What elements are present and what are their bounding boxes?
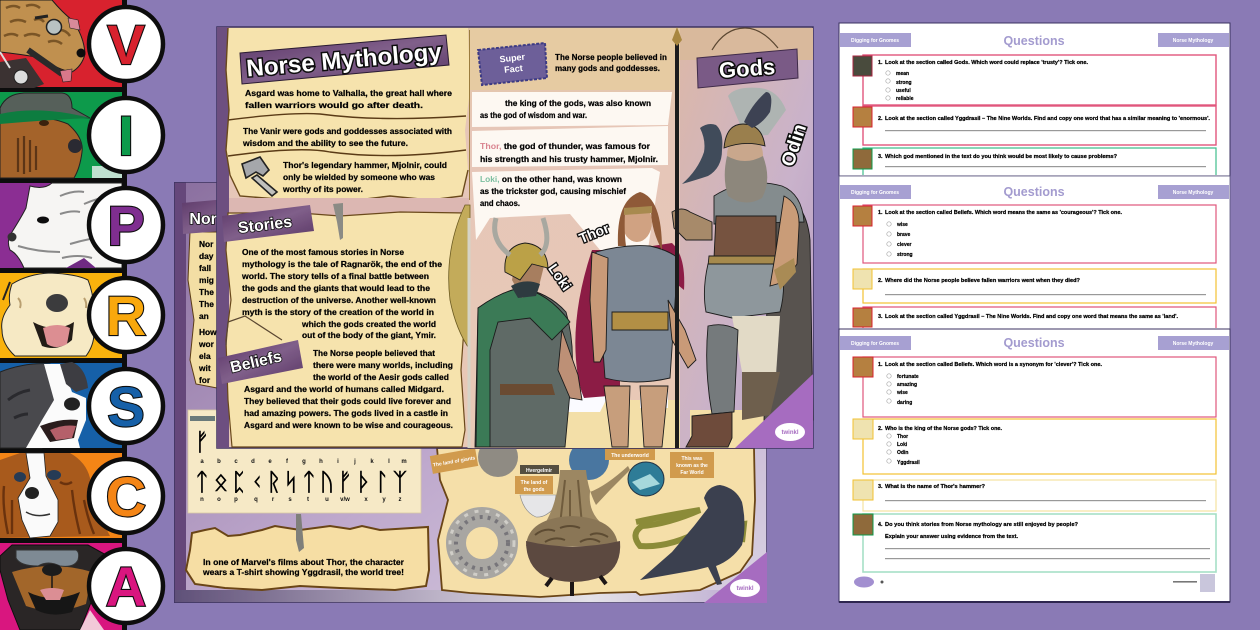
panel: gods right background xyxy=(470,28,813,448)
panel: Marvel fact parchment: wears a T-shirt showing Yggdrasil, the world tree! xyxy=(202,567,404,577)
question 3: 3. xyxy=(878,314,883,320)
icon: blue world orb xyxy=(569,448,609,480)
panel: rune alphabet: ᛉ xyxy=(393,468,407,496)
parchment: facts xyxy=(226,28,470,202)
rope: beliefs sign xyxy=(226,316,282,345)
panel: rune alphabet: r xyxy=(272,497,275,503)
panel: rune alphabet: n xyxy=(200,497,204,503)
Loki face xyxy=(512,258,545,298)
Thor band xyxy=(624,206,652,215)
question 1: 1. xyxy=(878,362,883,368)
banner: Norse (partly hidden) xyxy=(182,200,216,234)
letter I xyxy=(89,98,163,172)
panel: rune alphabet: g xyxy=(302,459,306,465)
panel: rune alphabet: ᛚ xyxy=(375,468,389,496)
box: Loki fact: and chaos. xyxy=(480,198,520,208)
panel: rune alphabet: v/w xyxy=(340,497,350,503)
panel: rune alphabet: ᚲ xyxy=(250,468,264,496)
header tag right xyxy=(1158,185,1229,199)
panel: rune alphabet: x xyxy=(364,497,368,503)
banner: Norse (partly hidden): Norse xyxy=(189,211,235,228)
panel: rune alphabet: e xyxy=(268,459,272,465)
back page partial text: for xyxy=(199,375,211,385)
question 1: strong xyxy=(896,80,912,86)
icon: serpent xyxy=(635,510,744,546)
question 1: useful xyxy=(896,88,911,94)
text: intro: many gods and goddesses. xyxy=(555,63,660,73)
heading: Beliefs xyxy=(218,340,303,384)
Thor belt xyxy=(612,312,668,330)
text: beliefs: Asgard and the world of humans called Midgard. xyxy=(244,384,444,394)
text: Mjolnir fact: worthy of its power. xyxy=(282,184,363,194)
heading: Gods: Gods xyxy=(718,54,776,83)
question 1: fortunate xyxy=(897,374,919,380)
letter R xyxy=(89,278,163,352)
back page partial text xyxy=(198,239,217,385)
label: Thor: Thor xyxy=(577,220,612,246)
panel: rune alphabet: m xyxy=(401,459,407,465)
box: Odin fact: the king of the gods, was also known xyxy=(505,98,651,108)
header tag left: Digging for Gnomes xyxy=(851,341,899,347)
box: Odin fact: as the god of wisdom and war. xyxy=(480,110,587,120)
panel: rune alphabet: y xyxy=(382,497,386,503)
panel: rune alphabet: o xyxy=(217,497,221,503)
logo: back page twinkl: twinkl xyxy=(736,586,754,592)
header tag right: Norse Mythology xyxy=(1173,38,1213,44)
panel: rune alphabet: ᛟ xyxy=(214,468,228,496)
label: Odin: Odin xyxy=(778,122,811,169)
labels: world tags xyxy=(430,448,714,494)
Thor cape right xyxy=(626,243,684,290)
icon: nail xyxy=(333,203,343,240)
axe xyxy=(449,205,470,448)
text: Mjolnir fact: only be wielded by someone who was xyxy=(283,172,435,182)
question 1: wise xyxy=(896,222,908,228)
question 1 xyxy=(853,357,1216,417)
text: beliefs: there were many worlds, including xyxy=(313,360,453,370)
panel: rune alphabet: p xyxy=(234,497,238,503)
labels: world tags: The land of giants xyxy=(433,455,476,469)
question 2: Look at the section called Yggdrasil – The Nine Worlds. Find and copy one word that has a similar meaning to 'enormous'. xyxy=(885,116,1211,122)
badge: logo: Super xyxy=(499,52,526,64)
Thor legs xyxy=(604,386,668,447)
panel: rune alphabet: d xyxy=(251,459,255,465)
Loki mask xyxy=(511,281,540,298)
question 2: Odin xyxy=(897,450,908,456)
text: intro xyxy=(555,52,667,73)
letter S xyxy=(89,369,163,443)
text: stories: destruction of the universe. Another well-known xyxy=(242,295,436,305)
figure: Loki xyxy=(475,218,582,447)
letter P: P xyxy=(107,194,145,257)
panel: rune alphabet: ᛋ xyxy=(284,468,298,496)
text: Valhalla fact: fallen warriors would go after death. xyxy=(245,100,423,110)
back page partial text: fall xyxy=(199,263,211,273)
letter A: A xyxy=(106,555,146,618)
question 2 xyxy=(853,269,1216,303)
text: stories: out of the body of the giant, Ymir. xyxy=(302,330,436,340)
Loki helmet xyxy=(505,243,548,280)
question 3: Which god mentioned in the text do you think would be most likely to cause problems? xyxy=(885,154,1117,160)
panel: rune alphabet: ᚠ xyxy=(338,468,352,496)
panel: rune alphabet: ᚦ xyxy=(357,468,371,496)
Odin cloak xyxy=(764,190,813,420)
corner: back page xyxy=(704,552,767,603)
question 2: Thor xyxy=(897,434,908,440)
question 2: 2. xyxy=(878,116,883,122)
labels: world tags: Hvergelmir xyxy=(526,468,552,474)
Loki horns xyxy=(495,218,547,255)
letter C: C xyxy=(106,465,146,528)
panel: rune alphabet: ᚢ xyxy=(320,468,334,496)
panel: back reading page xyxy=(174,182,767,603)
panel: rune alphabet: ᛏ xyxy=(195,468,209,496)
Thor arm xyxy=(590,252,608,362)
question 3 xyxy=(853,480,1216,511)
letter C xyxy=(89,459,163,533)
heading: Questions: Questions xyxy=(1003,34,1065,48)
logo: front page twinkl xyxy=(775,423,805,441)
text: stories xyxy=(241,247,442,340)
question 1: brave xyxy=(897,232,911,238)
label: Loki: Loki xyxy=(545,261,575,293)
Odin helmet wings xyxy=(728,88,786,136)
question 2: Yggdrasil xyxy=(897,460,920,466)
text: beliefs: They believed that their gods could live forever and xyxy=(244,396,451,406)
panel: rune alphabet: u xyxy=(325,497,329,503)
title: Norse Mythology: Norse Mythology xyxy=(245,38,443,82)
text: beliefs: Asgard and were known to be wise and courageous. xyxy=(244,420,453,430)
text: stories: myth is the story of the creation of the world in xyxy=(242,307,434,317)
text: stories: One of the most famous stories in Norse xyxy=(242,247,404,257)
footer: site and QR xyxy=(1173,574,1215,592)
back page partial text: The xyxy=(199,287,214,297)
box: Thor fact xyxy=(472,126,668,167)
text: stories: which the gods created the world xyxy=(301,319,436,329)
question 1: wise xyxy=(896,390,908,396)
back page partial text: wor xyxy=(198,339,215,349)
dog portraits xyxy=(0,0,127,630)
panel: Yggdrasil parchment xyxy=(430,437,755,597)
box: Loki fact xyxy=(472,168,660,300)
question 4: Do you think stories from Norse mythology are still enjoyed by people? xyxy=(885,522,1078,528)
text: Mjolnir fact: Thor's legendary hammer, Mjolnir, could xyxy=(283,160,447,170)
header tag right xyxy=(1158,336,1229,350)
panel: Marvel fact parchment: In one of Marvel's films about Thor, the character xyxy=(203,557,405,567)
panel: rune alphabet: ᚱ xyxy=(267,468,281,496)
question 2: Where did the Norse people believe fallen warriors went when they died? xyxy=(885,278,1080,284)
panel: VIPERS dog strip xyxy=(0,0,163,630)
Odin skirt xyxy=(704,264,784,318)
question 1: clever xyxy=(897,242,912,248)
Odin left leg xyxy=(707,325,738,414)
heading: Questions: Questions xyxy=(1003,185,1065,199)
panel: rune alphabet: t xyxy=(307,497,309,503)
Odin face xyxy=(727,135,763,175)
panel: rune alphabet: i xyxy=(337,459,339,465)
Odin jerkin xyxy=(714,216,776,258)
labels: world tags: known as the xyxy=(676,463,708,469)
Odin mail xyxy=(714,183,804,224)
question 2: Loki xyxy=(897,442,908,448)
figure: Odin xyxy=(672,88,813,447)
panel: rune alphabet: j xyxy=(353,459,356,465)
parchment: stories and beliefs xyxy=(226,212,466,447)
spear xyxy=(672,27,682,448)
icon: world tree xyxy=(526,466,630,546)
Odin forearm xyxy=(672,209,712,240)
box: Thor fact: Thor, the god of thunder, was famous for xyxy=(480,141,651,151)
band behind stories xyxy=(229,198,469,218)
Thor cape xyxy=(575,250,620,398)
letter S: S xyxy=(107,375,145,438)
header tag right: Norse Mythology xyxy=(1173,190,1213,196)
letter A xyxy=(89,549,163,623)
icon: white bowl xyxy=(520,495,556,517)
logo: front page twinkl: twinkl xyxy=(781,430,799,436)
raven on helmet xyxy=(744,92,771,128)
header tag left xyxy=(840,185,911,199)
text: Vanir fact xyxy=(242,126,452,148)
Odin beard xyxy=(725,156,767,203)
question 3: Look at the section called Yggdrasil – The Nine Worlds. Find and copy one word that means the same as 'land'. xyxy=(885,314,1179,320)
question 1 xyxy=(853,55,1216,105)
Thor forearm xyxy=(668,300,696,368)
icon: hammer xyxy=(242,157,277,196)
panel: rune alphabet: h xyxy=(319,459,323,465)
panel: rune alphabet: ᛏ xyxy=(302,468,316,496)
Thor face xyxy=(622,202,652,242)
labels: world tags: This was xyxy=(681,456,703,462)
heading: Beliefs: Beliefs xyxy=(229,348,284,377)
back page partial text: Nor xyxy=(199,239,214,249)
question 3 xyxy=(853,307,1216,328)
back page partial text: day xyxy=(199,251,214,261)
panel: rune alphabet: q xyxy=(254,497,258,503)
Odin bracer xyxy=(774,258,796,290)
Loki cloak xyxy=(476,288,570,447)
question 4 xyxy=(853,514,1216,572)
back page partial text: ela xyxy=(199,351,211,361)
back page partial text: How xyxy=(199,327,217,337)
letter V xyxy=(89,7,163,81)
question 4: Explain your answer using evidence from the text. xyxy=(885,534,1019,540)
Loki belt xyxy=(500,384,555,395)
question 2: 2. xyxy=(878,426,883,432)
Odin boot xyxy=(686,412,732,447)
Odin arm xyxy=(770,196,799,286)
header tag left xyxy=(840,33,911,47)
labels: world tags: Far World xyxy=(680,470,704,476)
question 1: daring xyxy=(897,400,912,406)
raven on arm xyxy=(682,124,722,184)
question 3: What is the name of Thor's hammer? xyxy=(885,484,985,490)
panel: rune alphabet: ᛈ xyxy=(232,468,246,496)
text: Valhalla fact xyxy=(245,88,452,110)
figure: Thor xyxy=(575,192,696,447)
Odin belt xyxy=(708,256,780,266)
question 2: 2. xyxy=(878,278,883,284)
labels: world tags: The land of xyxy=(521,480,548,486)
panel: rune alphabet: f xyxy=(286,459,289,465)
text: beliefs xyxy=(244,348,453,430)
labels: world tags: the gods xyxy=(524,487,545,493)
panel: front reading page xyxy=(217,27,813,448)
Thor hair xyxy=(618,192,662,250)
badge: logo: Fact xyxy=(504,63,523,75)
header tag right xyxy=(1158,33,1229,47)
back page partial text: an xyxy=(199,311,209,321)
panel: rune alphabet: ᚠ xyxy=(195,428,209,456)
letter R: R xyxy=(106,284,146,347)
icon: raven xyxy=(640,485,744,585)
text: Vanir fact: wisdom and the ability to see the future. xyxy=(242,138,408,148)
panel: worksheet page 3 xyxy=(839,329,1230,603)
box: Odin fact xyxy=(472,92,672,127)
question 1: reliable xyxy=(896,96,914,102)
panel: rune alphabet: k xyxy=(370,459,374,465)
question 1: 1. xyxy=(878,60,883,66)
panel: rune alphabet: s xyxy=(288,497,292,503)
labels: world tags: The underworld xyxy=(611,453,649,459)
heading: Gods xyxy=(697,49,798,88)
question 1: amazing xyxy=(897,382,917,388)
question 2 xyxy=(853,106,1216,145)
panel: worksheet page 2 xyxy=(839,176,1230,329)
text: beliefs: the world of the Aesir gods called xyxy=(313,372,449,382)
panel: Marvel fact parchment xyxy=(186,514,429,590)
heading: Stories xyxy=(222,205,314,242)
question 1: Look at the section called Gods. Which word could replace 'trusty'? Tick one. xyxy=(885,60,1089,66)
panel: rune alphabet: c xyxy=(234,459,238,465)
header tag left: Digging for Gnomes xyxy=(851,38,899,44)
question 2: Who is the king of the Norse gods? Tick one. xyxy=(885,426,1003,432)
panel: worksheet page 1 xyxy=(839,23,1230,176)
text: stories: the gods and the giants that would lead to the xyxy=(242,283,430,293)
panel: rune alphabet: z xyxy=(398,497,402,503)
Odin helmet xyxy=(724,124,765,148)
question 1: 1. xyxy=(878,210,883,216)
back page partial text: The xyxy=(199,299,214,309)
header tag left xyxy=(840,336,911,350)
text: beliefs: had amazing powers. The gods lived in a castle in xyxy=(244,408,448,418)
panel: rune alphabet: a xyxy=(200,459,204,465)
text: intro: The Norse people believed in xyxy=(555,52,667,62)
text: stories: world. The story tells of a final battle between xyxy=(241,271,429,281)
panel: rune alphabet: b xyxy=(217,459,221,465)
text: Mjolnir fact xyxy=(282,160,447,194)
Odin shin xyxy=(742,372,780,420)
badge: logo xyxy=(478,43,547,85)
Loki arm xyxy=(558,330,582,400)
Loki tunic xyxy=(475,288,572,447)
heading: Stories: Stories xyxy=(237,214,293,237)
back page partial text: wit xyxy=(198,363,211,373)
box: Loki fact: Loki, on the other hand, was known xyxy=(480,174,622,184)
letter P xyxy=(89,188,163,262)
letter V: V xyxy=(107,13,145,76)
text: stories: mythology is the tale of Ragnarök, the end of the xyxy=(242,259,442,269)
back page partial text: mig xyxy=(199,275,214,285)
panel: rune alphabet: l xyxy=(388,459,390,465)
header tag right: Norse Mythology xyxy=(1173,341,1213,347)
question 4: 4. xyxy=(878,522,883,528)
question 1: mean xyxy=(896,71,909,77)
icon: grey world orb xyxy=(478,448,518,477)
Thor tunic xyxy=(596,246,678,382)
question 1: Look at the section called Beliefs. Which word is a synonym for 'clever'? Tick one. xyxy=(885,362,1103,368)
text: beliefs: The Norse people believed that xyxy=(313,348,435,358)
panel: rune alphabet xyxy=(188,410,421,513)
letter I: I xyxy=(118,104,134,167)
box: Thor fact: his strength and his trusty hammer, Mjolnir. xyxy=(480,154,658,164)
icon: teal world orb xyxy=(628,462,664,496)
question 1: strong xyxy=(897,252,913,258)
text: Valhalla fact: Asgard was home to Valhalla, the great hall where xyxy=(245,88,452,98)
question 1 xyxy=(853,205,1216,263)
text: Vanir fact: The Vanir were gods and goddesses associated with xyxy=(243,126,452,136)
footer: twinkl logo xyxy=(854,576,884,588)
box: Loki fact: as the trickster god, causing mischief xyxy=(480,186,626,196)
corner: front page xyxy=(735,374,813,448)
heading: Questions: Questions xyxy=(1003,336,1065,350)
Odin trousers xyxy=(732,316,780,375)
question 3: 3. xyxy=(878,154,883,160)
question 1: Look at the section called Beliefs. Which word means the same as 'courageous'? Tick one. xyxy=(885,210,1123,216)
icon: ring xyxy=(450,511,514,575)
hanging sign rope xyxy=(712,28,778,50)
icon: cauldron xyxy=(526,541,620,596)
question 3 xyxy=(853,148,1216,175)
question 3: 3. xyxy=(878,484,883,490)
logo: back page twinkl xyxy=(730,579,760,597)
header tag left: Digging for Gnomes xyxy=(851,190,899,196)
question 2 xyxy=(853,419,1216,474)
